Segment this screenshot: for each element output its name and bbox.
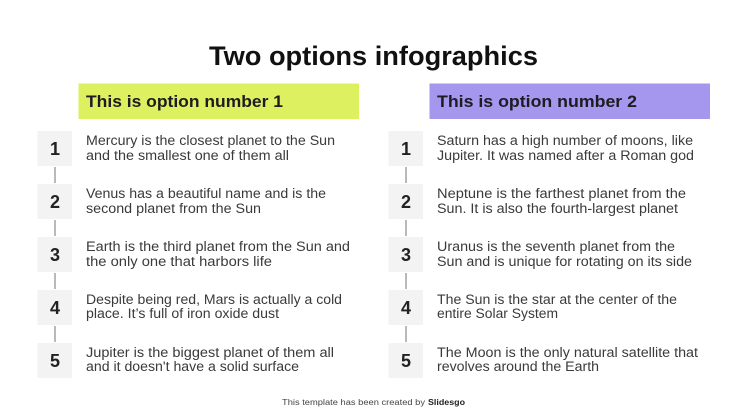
item 1: Saturn: Saturn has a high number of moons, like [437, 133, 693, 148]
connector lines: option 2 [405, 167, 407, 342]
item 2: Venus: 2 [50, 192, 60, 212]
item 5: Moon: The Moon is the only natural satellite that [437, 345, 698, 360]
item 2: Venus [38, 184, 326, 219]
item 3: Uranus: 3 [401, 245, 411, 265]
item 3: Earth [38, 237, 350, 272]
item 2: Neptune [388, 184, 686, 219]
item 4: Sun: entire Solar System [437, 306, 558, 321]
connector lines: option 1 [54, 167, 56, 342]
item 3: Uranus: Uranus is the seventh planet from the [437, 239, 675, 254]
heading: option 2: This is option number 2 [437, 92, 637, 111]
item 4: Mars: Despite being red, Mars is actually a cold [86, 292, 342, 307]
item 1: Mercury: and the smallest one of them all [86, 148, 289, 163]
heading: option 1: This is option number 1 [86, 92, 283, 111]
heading: option 2 [430, 84, 710, 119]
item 1: Mercury: Mercury is the closest planet to the Sun [86, 133, 335, 148]
item 4: Mars [38, 290, 342, 325]
item 4: Sun: 4 [401, 298, 411, 318]
item 5: Moon: revolves around the Earth [437, 359, 599, 374]
item 5: Jupiter: Jupiter is the biggest planet of them all [86, 345, 334, 360]
title: Two options infographics [209, 41, 538, 71]
heading: option 1 [78, 84, 359, 119]
item 1: Saturn: 1 [401, 139, 411, 159]
item 3: Earth: 3 [50, 245, 60, 265]
footer credit: This template has been created by [282, 398, 425, 407]
item 1: Mercury [38, 131, 335, 166]
item 1: Saturn [388, 131, 694, 166]
item 1: Saturn: Jupiter. It was named after a Roman god [437, 148, 694, 163]
item 4: Sun: The Sun is the star at the center of the [437, 292, 677, 307]
item 3: Earth: Earth is the third planet from the Sun and [86, 239, 350, 254]
item 3: Earth: the only one that harbors life [86, 254, 272, 269]
item 2: Neptune: 2 [401, 192, 411, 212]
footer credit: Slidesgo [428, 398, 465, 407]
item 4: Sun [388, 290, 677, 325]
item 5: Jupiter: 5 [50, 351, 60, 371]
item 5: Jupiter [38, 343, 334, 378]
item 5: Moon [388, 343, 698, 378]
item 2: Neptune: Neptune is the farthest planet from the [437, 186, 686, 201]
item 3: Uranus [388, 237, 692, 272]
item 2: Venus: second planet from the Sun [86, 201, 261, 216]
panel: option 2 [388, 84, 710, 378]
footer credit [282, 398, 465, 407]
item 4: Mars: place. It’s full of iron oxide dust [86, 306, 279, 321]
item 2: Neptune: Sun. It is also the fourth-largest planet [437, 201, 678, 216]
item 5: Moon: 5 [401, 351, 411, 371]
item 5: Jupiter: and it doesn't have a solid surface [86, 359, 299, 374]
panel: option 1 [38, 84, 359, 378]
item 4: Mars: 4 [50, 298, 60, 318]
item 1: Mercury: 1 [50, 139, 60, 159]
item 2: Venus: Venus has a beautiful name and is the [86, 186, 326, 201]
item 3: Uranus: Sun and is unique for rotating on its side [437, 254, 692, 269]
